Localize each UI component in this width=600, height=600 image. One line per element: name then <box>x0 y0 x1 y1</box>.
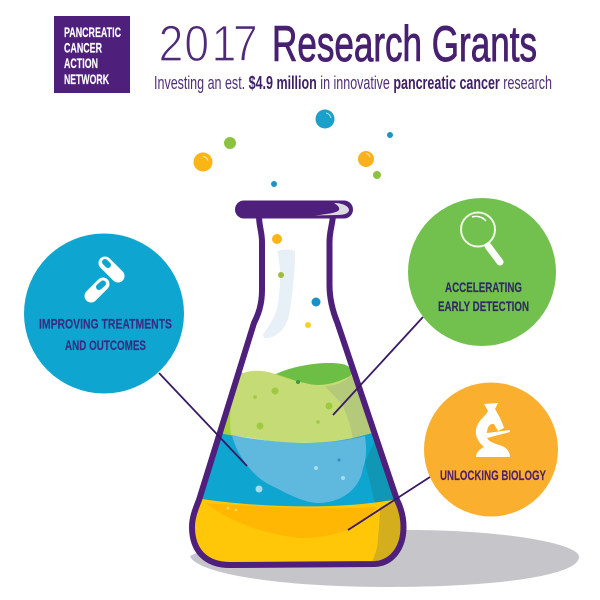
icon: microscope <box>476 403 510 457</box>
panel: improving treatments: IMPROVING TREATMENTS <box>39 316 172 332</box>
flask outline <box>192 216 404 565</box>
connector lines <box>159 317 430 530</box>
inner bubbles <box>272 234 320 328</box>
logo: CANCER <box>64 40 102 56</box>
floor shadow <box>190 530 579 587</box>
logo: ACTION <box>64 55 98 71</box>
panel: early detection: ACCELERATING <box>445 279 522 295</box>
logo: PANCREATIC <box>64 24 121 40</box>
panel: early detection <box>408 198 556 346</box>
panel: early detection: EARLY DETECTION <box>438 298 529 314</box>
panel: unlocking biology <box>424 382 558 516</box>
rim highlight <box>315 203 349 216</box>
floating bubbles <box>194 110 393 187</box>
flask rim <box>235 200 353 218</box>
flask liquid <box>195 363 400 562</box>
icon: pills <box>91 262 118 296</box>
flask <box>180 200 410 570</box>
title <box>159 15 537 73</box>
panel: unlocking biology: UNLOCKING BIOLOGY <box>440 467 546 483</box>
title: 2017 <box>159 16 258 73</box>
logo <box>54 16 130 93</box>
panel: improving treatments: AND OUTCOMES <box>65 337 146 353</box>
neck reflection <box>263 250 295 338</box>
panel: improving treatments <box>24 234 184 394</box>
logo: NETWORK <box>64 71 109 87</box>
icon: magnifying glass <box>461 212 500 262</box>
subtitle: Investing an est. $4.9 million in innovative pancreatic cancer research <box>154 73 552 93</box>
